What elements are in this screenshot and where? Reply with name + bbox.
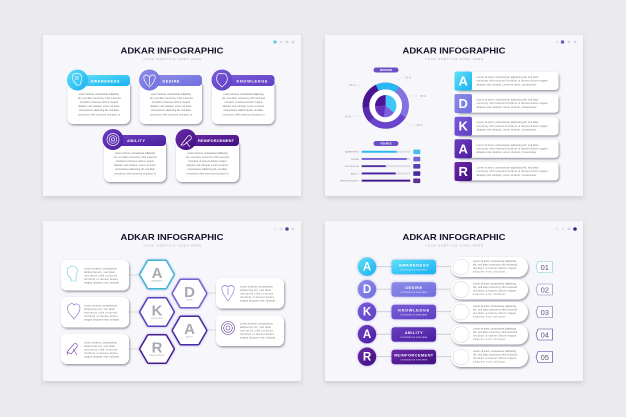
card: reinforcement: nonummy nibh euismod tincidunt ut: [186, 172, 229, 176]
card: ability text: tincidunt ut laoreet dolore: [240, 333, 275, 336]
chart labels: 25 %: [405, 76, 412, 80]
card: awareness text: tincidunt ut laoreet dolore: [84, 278, 119, 281]
row 05: reinforcement: tincidunt ut laoreet dolore magna: [473, 357, 517, 360]
card: desire: DESIRE: [162, 78, 180, 83]
card: desire text: nonummy nibh euismod: [240, 292, 274, 296]
card: reinforcement text: nonummy nibh euismod: [84, 348, 118, 352]
card: ability: tincidunt ut laoreet dolore magna: [116, 160, 155, 163]
subtitle: YOUR SUBTITLE GOES HERE: [425, 244, 483, 248]
row 03: knowledge: 03: [541, 308, 549, 317]
process pill: PROCESS: [380, 69, 392, 72]
title: ADKAR INFOGRAPHIC: [402, 46, 506, 56]
card: ability text: adipiscing elit, sed diam: [240, 326, 271, 329]
hexagon: A: ABILITY: [186, 336, 194, 338]
donut chart: [366, 86, 406, 125]
row 05: reinforcement: Lorem sit amet, consectetuer adipiscing: [473, 350, 517, 353]
row 01: awareness: aliquam erat volutpat.: [473, 270, 506, 274]
row: D: Lorem sit amet, consectetuer adipiscing elit, sed diam: [476, 98, 538, 102]
card: reinforcement: [176, 129, 239, 182]
card: desire: [139, 70, 202, 124]
hexagon: A: AWARENESS: [151, 280, 163, 282]
card: knowledge: Lorem sit amet, consectetuer adipiscing: [224, 93, 264, 96]
card: reinforcement text: magna aliquam erat volutpat: [84, 356, 119, 358]
card: ability: aliquam erat volutpat. Lorem sit amet,: [114, 164, 156, 167]
card: ability text: nonummy nibh euismod: [240, 330, 274, 332]
bar chart: AWARENESS: [345, 150, 360, 154]
card: knowledge text: [61, 297, 129, 328]
row: D: [454, 94, 558, 113]
card: desire: Lorem sit amet, consectetuer adipiscing: [151, 93, 192, 96]
row 01: awareness: tincidunt ut laoreet dolore magna: [473, 267, 517, 270]
row 01: awareness: [358, 257, 552, 277]
card: knowledge text: Lorem sit amet, consectetuer: [84, 304, 117, 308]
row 05: reinforcement: REINFORCEMENT: [394, 352, 434, 358]
card: knowledge text: magna aliquam erat volutpat: [84, 318, 119, 322]
panel: list layout: [325, 221, 583, 381]
subtitle: YOUR SUBTITLE GOES HERE: [143, 57, 201, 61]
icon: head: [73, 74, 81, 85]
row: A: A: [459, 141, 469, 156]
card: knowledge: elit, sed diam nonummy nibh euismod: [222, 97, 266, 100]
card: reinforcement: elit, sed diam nonummy nibh euismod: [186, 156, 230, 159]
row: A: nonummy nibh euismod tincidunt ut laoreet dolore magna: [476, 80, 548, 83]
chart labels: 25 %: [416, 123, 423, 127]
hexagon: R: R: [152, 340, 163, 356]
row 02: desire: aliquam erat volutpat.: [473, 293, 506, 296]
card: awareness text: Lorem sit amet, consectetuer: [84, 268, 117, 270]
pagination dots: [556, 40, 576, 44]
row 04: ability: [358, 324, 552, 344]
hexagon: D: DESIRE: [186, 300, 194, 302]
bar chart: ABILITY: [351, 172, 360, 175]
figures pill: FIGURES: [380, 142, 392, 146]
row 02: desire: [358, 280, 552, 300]
card: knowledge: tincidunt ut laoreet dolore magna: [224, 101, 263, 104]
subtitle: YOUR SUBTITLE GOES HERE: [143, 244, 201, 248]
row 04: ability: 04: [541, 330, 549, 340]
card: ability text: [216, 316, 284, 346]
card: awareness text: [61, 260, 129, 290]
card: desire: aliquam erat volutpat. Lorem sit amet,: [150, 105, 192, 108]
hexagon: A: [141, 262, 173, 288]
hexagon: A: A: [184, 321, 195, 338]
row 05: reinforcement: R: [363, 352, 372, 364]
hexagon: K: KNOWLEDGE: [151, 318, 164, 320]
row 01: awareness: YOUR SUBTITLE GOES HERE: [400, 270, 428, 272]
inner pie: [375, 95, 396, 117]
row 04: ability: Lorem sit amet, consectetuer adipiscing: [473, 328, 517, 330]
row: K: [454, 117, 558, 136]
row 04: ability: aliquam erat volutpat.: [473, 338, 506, 341]
hexagon: D: D: [184, 284, 195, 301]
pagination dots: [274, 227, 294, 231]
row: K: Lorem sit amet, consectetuer adipiscing elit, sed diam: [476, 121, 538, 124]
row 02: desire: D: [363, 284, 371, 296]
card: knowledge text: tincidunt ut laoreet dolore: [84, 315, 119, 318]
card: knowledge: consectetuer adipiscing elit, sed diam: [224, 109, 264, 112]
row: A: aliquam erat volutpat. Lorem sit amet, consectetuer: [476, 151, 537, 154]
row: A: A: [459, 74, 469, 88]
row: R: nonummy nibh euismod tincidunt ut laoreet dolore magna: [476, 170, 548, 173]
card: knowledge text: adipiscing elit, sed diam: [84, 308, 115, 311]
icon: brain heart: [217, 73, 227, 87]
card: reinforcement: consectetuer adipiscing elit, sed diam: [188, 168, 228, 171]
row 02: desire: YOUR SUBTITLE GOES HERE: [400, 292, 428, 294]
row 01: awareness: elit, sed diam nonummy nibh euismod: [473, 264, 518, 266]
subtitle: YOUR SUBTITLE GOES HERE: [425, 57, 483, 61]
pagination dots: [273, 40, 294, 44]
card: awareness text: adipiscing elit, sed diam: [84, 271, 115, 274]
card: awareness: nonummy nibh euismod tincidunt ut: [78, 114, 120, 116]
card: ability: ABILITY: [127, 138, 145, 143]
card: desire: nonummy nibh euismod tincidunt ut: [150, 114, 192, 116]
row 05: reinforcement: elit, sed diam nonummy nibh euismod: [473, 354, 518, 356]
row 03: knowledge: elit, sed diam nonummy nibh euismod: [473, 308, 518, 312]
card: ability: nonummy nibh euismod tincidunt ut: [114, 172, 156, 176]
card: desire text: [216, 278, 284, 308]
chart labels: 25 %: [420, 94, 427, 98]
hexagon: K: K: [152, 302, 163, 320]
card: ability: elit, sed diam nonummy nibh euismod: [114, 156, 157, 159]
row: R: [454, 162, 558, 181]
icon: target outline: [222, 322, 234, 334]
row 04: ability: elit, sed diam nonummy nibh euismod: [473, 331, 518, 334]
icon: target: [107, 134, 119, 146]
row 03: knowledge: KNOWLEDGE: [398, 308, 430, 312]
card: knowledge: [212, 70, 274, 124]
icon: megaphone outline: [67, 344, 77, 355]
row 01: awareness: A: [363, 262, 371, 274]
row: D: aliquam erat volutpat. Lorem sit amet, consectetuer: [476, 106, 537, 109]
row 03: knowledge: [358, 302, 552, 322]
donut white ring: [370, 90, 402, 122]
card: knowledge text: nonummy nibh euismod: [84, 312, 118, 314]
card: reinforcement text: Lorem sit amet, consectetuer: [84, 342, 117, 344]
figures pill: [374, 141, 398, 146]
icon: heart bulb: [144, 75, 155, 87]
pagination dots: [556, 227, 577, 231]
hexagon: A: [174, 318, 206, 344]
row 02: desire: 02: [541, 286, 549, 294]
row 04: ability: ABILITY: [405, 330, 423, 335]
card: awareness: AWARENESS: [90, 78, 120, 83]
card: desire text: adipiscing elit, sed diam: [240, 289, 271, 292]
icon: megaphone hand: [181, 136, 191, 147]
connectors: [129, 275, 216, 349]
card: ability text: Lorem sit amet, consectetuer: [240, 322, 273, 326]
panel: cards layout: [43, 35, 301, 196]
row 02: desire: tincidunt ut laoreet dolore magna: [473, 290, 517, 292]
title: ADKAR INFOGRAPHIC: [120, 46, 224, 56]
row 03: knowledge: aliquam erat volutpat.: [473, 316, 506, 318]
card: reinforcement text: [61, 334, 129, 364]
row: R: Lorem sit amet, consectetuer adipiscing elit, sed diam: [476, 166, 538, 170]
card: reinforcement: Lorem sit amet, consectetuer adipiscing: [188, 152, 228, 155]
title: ADKAR INFOGRAPHIC: [120, 233, 224, 242]
row: D: D: [459, 96, 468, 111]
row 05: reinforcement: YOUR SUBTITLE GOES HERE: [400, 360, 428, 362]
card: reinforcement text: adipiscing elit, sed diam: [84, 345, 115, 348]
chart labels: [345, 76, 427, 127]
row 05: reinforcement: 05: [541, 353, 549, 362]
row 05: reinforcement: aliquam erat volutpat.: [473, 360, 506, 364]
hexagon: K: [141, 299, 173, 325]
row 03: knowledge: K: [363, 307, 372, 319]
hexagon: R: [141, 336, 173, 362]
row: K: nonummy nibh euismod tincidunt ut laoreet dolore magna: [476, 125, 548, 128]
icon: heart outline: [68, 304, 80, 319]
card: awareness: consectetuer adipiscing elit, sed diam: [79, 109, 119, 112]
card: desire: tincidunt ut laoreet dolore magna: [152, 101, 191, 104]
card: desire text: Lorem sit amet, consectetuer: [240, 286, 273, 288]
hexagon: R: REINFORCEMENT: [149, 355, 166, 357]
bar chart: [340, 150, 420, 183]
row: R: R: [459, 164, 469, 179]
card: ability text: magna aliquam erat volutpat: [240, 336, 275, 340]
card: desire text: tincidunt ut laoreet dolore: [240, 296, 275, 299]
card: reinforcement: tincidunt ut laoreet dolore magna: [188, 160, 227, 163]
card: awareness: aliquam erat volutpat. Lorem sit amet,: [78, 105, 120, 108]
panel: charts and letters: [325, 35, 583, 196]
row: A: nonummy nibh euismod tincidunt ut laoreet dolore magna: [476, 148, 548, 150]
card: ability: Lorem sit amet, consectetuer adipiscing: [115, 152, 156, 155]
card: ability: consectetuer adipiscing elit, sed diam: [115, 168, 155, 171]
hexagon: A: A: [152, 265, 163, 282]
card: awareness: Lorem sit amet, consectetuer adipiscing: [79, 93, 120, 96]
card: awareness: tincidunt ut laoreet dolore magna: [80, 101, 119, 104]
row 04: ability: YOUR SUBTITLE GOES HERE: [400, 337, 428, 339]
row 02: desire: elit, sed diam nonummy nibh euismod: [473, 286, 518, 289]
row 01: awareness: AWARENESS: [399, 262, 429, 268]
row: A: aliquam erat volutpat. Lorem sit amet, consectetuer: [476, 83, 537, 86]
title: ADKAR INFOGRAPHIC: [402, 233, 506, 242]
hexagon: D: [174, 280, 206, 306]
card: desire: consectetuer adipiscing elit, sed diam: [151, 109, 191, 112]
row 02: desire: Lorem sit amet, consectetuer adipiscing: [473, 282, 517, 286]
row 04: ability: tincidunt ut laoreet dolore magna: [473, 334, 517, 338]
row 03: knowledge: YOUR SUBTITLE GOES HERE: [400, 314, 428, 316]
card: reinforcement: aliquam erat volutpat. Lorem sit amet,: [186, 164, 229, 167]
chart labels: 25 %: [345, 114, 352, 118]
chart labels: 25 %: [349, 83, 356, 87]
row: A: Lorem sit amet, consectetuer adipiscing elit, sed diam: [476, 76, 538, 79]
row: K: K: [459, 119, 469, 134]
card: awareness: elit, sed diam nonummy nibh euismod: [78, 97, 121, 100]
card: awareness: [67, 70, 130, 124]
row 02: desire: DESIRE: [405, 285, 423, 290]
card: awareness text: magna aliquam erat volutpat: [84, 282, 119, 284]
card: desire: elit, sed diam nonummy nibh euismod: [150, 97, 193, 100]
card: reinforcement text: tincidunt ut laoreet dolore: [84, 352, 119, 355]
row: A: [454, 72, 558, 90]
icon: head outline: [67, 266, 77, 281]
row 04: ability: A: [363, 329, 371, 341]
card: knowledge: nonummy nibh euismod tincidunt ut: [222, 114, 265, 116]
panel: hexagons: [43, 221, 301, 381]
bar chart: DESIRE: [351, 159, 360, 161]
card: desire text: magna aliquam erat volutpat: [240, 300, 275, 302]
row: A: [454, 139, 558, 158]
row 01: awareness: Lorem sit amet, consectetuer adipiscing: [473, 260, 517, 263]
row: D: nonummy nibh euismod tincidunt ut laoreet dolore magna: [476, 102, 548, 105]
icon: heart bulb outline: [222, 286, 234, 301]
row 03: knowledge: tincidunt ut laoreet dolore magna: [473, 312, 517, 315]
row: R: aliquam erat volutpat. Lorem sit amet, consectetuer: [476, 174, 537, 177]
row 03: knowledge: Lorem sit amet, consectetuer adipiscing: [473, 305, 517, 308]
card: knowledge: aliquam erat volutpat. Lorem sit amet,: [222, 105, 265, 108]
row 05: reinforcement: [358, 347, 552, 367]
bar chart: KNOWLEDGE: [345, 166, 360, 168]
row: K: aliquam erat volutpat. Lorem sit amet, consectetuer: [476, 129, 537, 132]
card: awareness text: nonummy nibh euismod: [84, 274, 118, 278]
card: ability: [102, 129, 166, 182]
process pill: [374, 68, 398, 72]
card: knowledge: KNOWLEDGE: [236, 78, 268, 83]
row: A: Lorem sit amet, consectetuer adipiscing elit, sed diam: [476, 144, 538, 147]
card: reinforcement: REINFORCEMENT: [198, 138, 235, 143]
bar chart: REINFORCEMENT: [340, 180, 360, 182]
row 01: awareness: 01: [541, 263, 549, 272]
